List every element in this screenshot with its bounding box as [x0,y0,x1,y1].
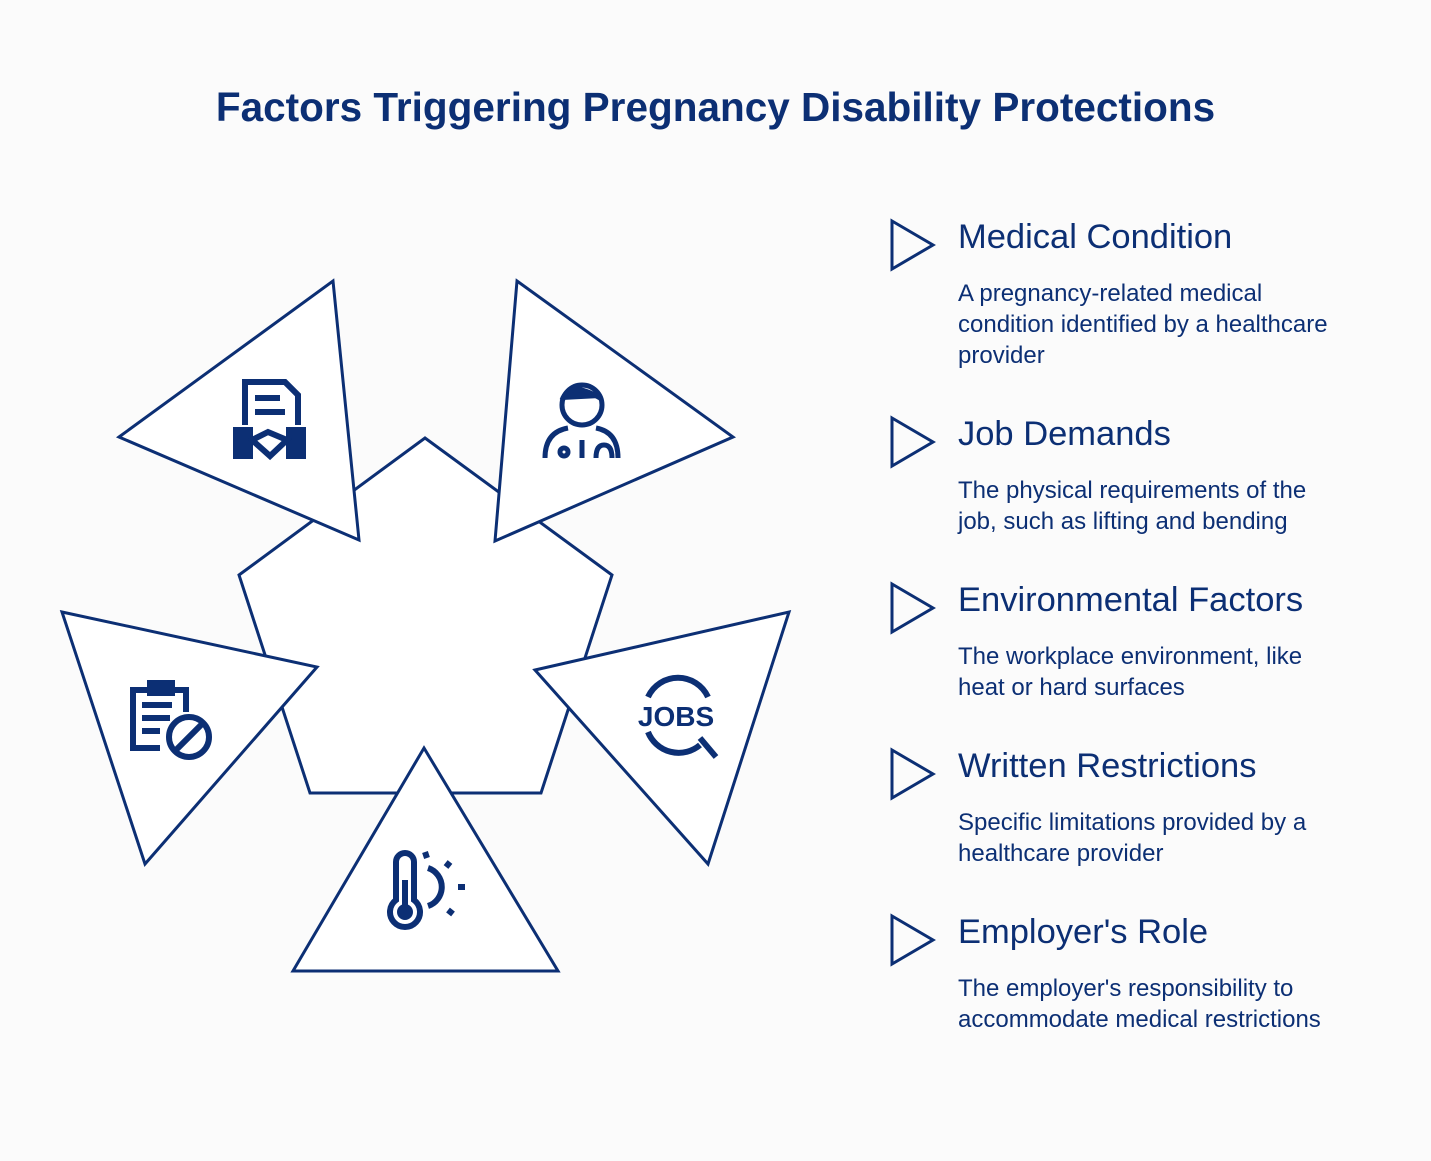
text: healthcare provider [958,840,1163,867]
text: job, such as lifting and bending [958,508,1288,535]
text: A pregnancy-related medical [958,280,1262,307]
triangle: contract [119,281,359,540]
item: Written Restrictions [890,747,1306,867]
text: The physical requirements of the [958,477,1306,504]
triangle: jobs [535,612,789,864]
icon: clipboard restriction [133,683,209,757]
icon: doctor [545,385,618,458]
title: Factors Triggering Pregnancy Disability Protections [216,84,1215,130]
text: Employer's Role [958,913,1208,951]
triangle: restrictions [62,612,317,864]
icon: thermometer sun [390,852,465,927]
text: Specific limitations provided by a [958,809,1306,836]
text: The employer's responsibility to [958,975,1293,1002]
icon: contract handshake [236,382,303,456]
text: accommodate medical restrictions [958,1006,1321,1033]
text: heat or hard surfaces [958,674,1185,701]
text: provider [958,342,1045,369]
triangle: doctor [495,281,733,541]
text: The workplace environment, like [958,643,1302,670]
item: Medical Condition [890,218,1328,369]
text: Job Demands [958,415,1171,453]
icon: jobs search [638,678,716,757]
text: Medical Condition [958,218,1232,256]
triangle: temperature [293,748,558,971]
text: Written Restrictions [958,747,1256,785]
item: Job Demands [890,415,1306,535]
pentagon [239,438,612,793]
icon: jobs search: JOBS [638,701,714,732]
item: Employer's Role [890,913,1321,1033]
item: Environmental Factors [890,581,1303,701]
diagram [60,278,792,972]
text: condition identified by a healthcare [958,311,1328,338]
text: Environmental Factors [958,581,1303,619]
